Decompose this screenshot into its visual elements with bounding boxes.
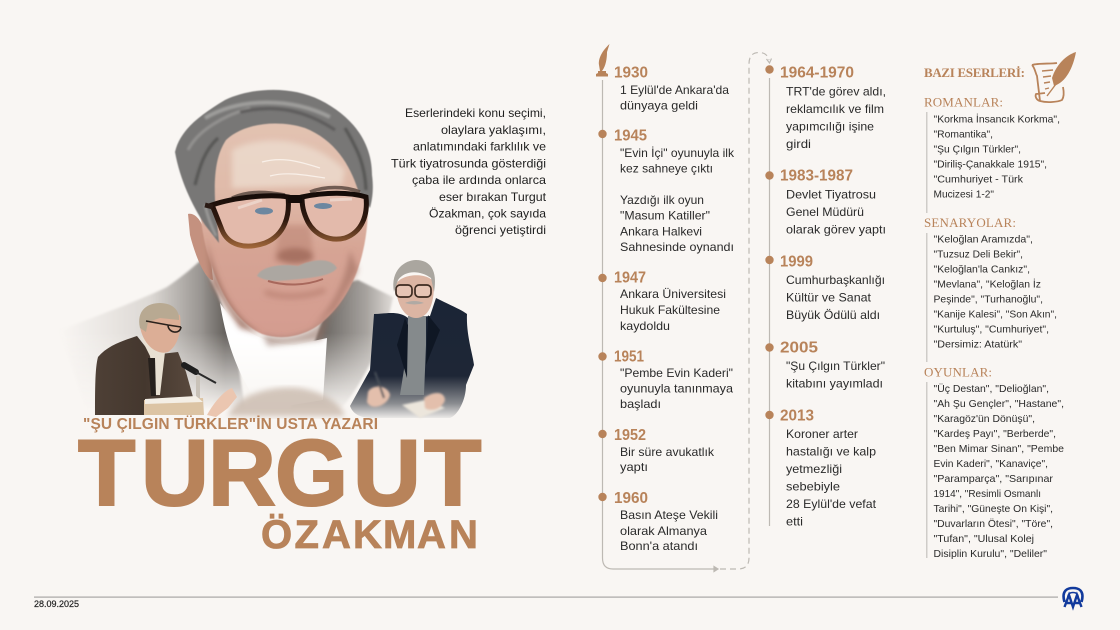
entry 1964-1970: yapımcılığı işine: [786, 120, 874, 134]
entry 1945: kez sahneye çıktı: [620, 162, 713, 176]
small photo: at the podium: [95, 303, 237, 417]
plays: "Üç Destan", "Delioğlan",: [934, 383, 1049, 395]
entry 2005: [765, 340, 885, 390]
screenplays: "Kanije Kalesi", "Son Akın",: [934, 308, 1057, 320]
entry 1951: 1951: [614, 348, 644, 366]
icon: quill and inkwell: [596, 44, 610, 76]
portrait collage: [60, 90, 474, 420]
typewriter shadow: [228, 387, 345, 416]
intro text: Özakman, çok sayıda: [429, 206, 546, 220]
plays: "Duvarların Ötesi", "Töre",: [934, 518, 1053, 530]
entry 2005: "Şu Çılgın Türkler": [786, 359, 885, 373]
microphone: [184, 365, 216, 398]
hand: [207, 388, 237, 417]
plays: Tarihi", "Güneşte On Kişi",: [934, 503, 1053, 515]
entry 1960: olarak Almanya: [620, 524, 707, 538]
novels: "Cumhuriyet - Türk: [934, 174, 1024, 186]
entry 1964-1970: [765, 64, 886, 151]
entry 1960: Basın Ateşe Vekili: [620, 508, 718, 522]
plays: "Karagöz'ün Dönüşü",: [934, 413, 1035, 425]
works panel: [924, 52, 1076, 560]
entry 1983-1987: 1983-1987: [780, 168, 853, 184]
plays: 1914", "Resimli Osmanlı: [934, 488, 1041, 500]
head: [140, 308, 180, 353]
entry 2013: 2013: [780, 408, 814, 424]
turtleneck: [400, 316, 426, 395]
intro text: anlatımındaki farklılık ve: [413, 140, 546, 154]
title: first name: TURGUT: [78, 420, 481, 525]
entry 2013: [765, 408, 877, 528]
entry 1964-1970: reklamcılık ve film: [786, 102, 884, 116]
entry 1947: [598, 270, 726, 333]
screenplays: "Tuzsuz Deli Bekir",: [934, 248, 1023, 260]
entry 2013: 28 Eylül'de vefat: [786, 497, 877, 511]
entry 1952: Bir süre avukatlık: [620, 445, 715, 459]
facial shading: [206, 140, 358, 346]
entry 2013: Koroner arter: [786, 427, 858, 441]
works heading: BAZI ESERLERİ:: [924, 65, 1025, 80]
entry 1952: 1952: [614, 427, 646, 444]
hair: [175, 90, 373, 243]
entry 1947: 1947: [614, 270, 646, 286]
screenplays: "Kurtuluş", "Cumhuriyet",: [934, 324, 1049, 336]
plays: [924, 364, 1064, 560]
entry 1945: Sahnesinde oynandı: [620, 240, 734, 254]
screenplays: "Mevlana", "Keloğlan İz: [934, 278, 1041, 290]
entry 1945: Ankara Halkevi: [620, 224, 702, 238]
entry 1960: 1960: [614, 490, 648, 507]
mouth: [268, 279, 323, 285]
entry 2013: sebebiyle: [786, 480, 840, 494]
screenplays: [924, 215, 1057, 362]
entry 1960: Bonn'a atandı: [620, 539, 698, 553]
entry 1951: [598, 348, 733, 411]
plays: "Paramparça", "Sarıpınar: [934, 473, 1054, 485]
entry 1999: [765, 254, 885, 322]
intro text: [391, 106, 547, 237]
intro text: olaylara yaklaşımı,: [441, 123, 546, 137]
intro text: öğrenci yetiştirdi: [455, 223, 546, 237]
timeline column 1: [598, 64, 735, 553]
entry 1945: Yazdığı ilk oyun: [620, 193, 704, 207]
novels: "Romantika",: [934, 128, 993, 140]
entry 1999: Cumhurbaşkanlığı: [786, 273, 885, 287]
entry 1951: "Pembe Evin Kaderi": [620, 366, 733, 380]
entry 1930: 1930: [614, 64, 648, 82]
entry 1930: 1 Eylül'de Ankara'da: [620, 83, 729, 97]
entry 2013: hastalığı ve kalp: [786, 444, 876, 458]
suit: [95, 336, 193, 415]
entry 1999: 1999: [780, 254, 813, 270]
hair: [393, 260, 435, 292]
moustache: [257, 260, 337, 281]
footer rule: [34, 596, 1058, 598]
intro text: eser bırakan Turgut: [439, 190, 547, 204]
screenplays: "Keloğlan'la Cankız",: [934, 264, 1030, 276]
entry 1964-1970: TRT'de görev aldı,: [786, 84, 886, 98]
entry 2013: yetmezliği: [786, 462, 842, 476]
entry 1999: Kültür ve Sanat: [786, 290, 872, 304]
entry 1930: dünyaya geldi: [620, 98, 698, 112]
suit: [350, 298, 474, 418]
screenplays: "Keloğlan Aramızda",: [934, 234, 1033, 246]
entry 1947: Hukuk Fakültesine: [620, 303, 720, 317]
subtitle: "ŞU ÇILGIN TÜRKLER"İN USTA YAZARI: [83, 416, 378, 433]
glasses: [205, 193, 366, 246]
entry 1983-1987: olarak görev yaptı: [786, 222, 886, 236]
lapels: [397, 315, 440, 378]
entry 1983-1987: Devlet Tiyatrosu: [786, 188, 876, 202]
main portrait: [60, 90, 393, 420]
entry 1952: [598, 427, 715, 474]
head: [396, 275, 434, 318]
screenplays: SENARYOLAR:: [924, 215, 1016, 230]
entry 1983-1987: [765, 168, 886, 236]
entry 1945: [598, 128, 735, 254]
timeline column 2: [765, 64, 886, 528]
eyebrows: [232, 188, 360, 198]
ear: [188, 214, 213, 280]
plays: "Ben Mimar Sinan", "Pembe: [934, 443, 1064, 455]
entry 1983-1987: Genel Müdürü: [786, 205, 864, 219]
intro text: Türk tiyatrosunda gösterdiği: [391, 156, 546, 170]
date: 28.09.2025: [34, 599, 79, 610]
moustache: [405, 301, 424, 304]
face: [199, 121, 368, 337]
novels: "Korkma İnsancık Korkma",: [934, 112, 1060, 126]
plays: Disiplin Kurulu", "Deliler": [934, 548, 1047, 560]
novels: Mucizesi 1-2": [934, 188, 994, 200]
entry 1930: [614, 64, 729, 112]
jacket and shirt: [86, 260, 394, 406]
intro text: Eserlerindeki konu seçimi,: [405, 106, 546, 120]
intro text: çaba ile ardında onlarca: [412, 173, 546, 187]
entry 1947: Ankara Üniversitesi: [620, 287, 726, 301]
entry 1945: "Evin İçi" oyunuyla ilk: [620, 146, 735, 160]
shirt and tie: [140, 336, 165, 395]
entry 1951: başladı: [620, 397, 661, 411]
entry 1947: kaydoldu: [620, 319, 670, 333]
entry 2013: etti: [786, 514, 803, 528]
hair highlights: [188, 102, 366, 236]
forehead wrinkles: [262, 160, 325, 178]
podium: [144, 398, 204, 415]
plays: "Ah Şu Gençler", "Hastane",: [934, 398, 1064, 410]
glasses: [146, 321, 181, 332]
papers: [145, 396, 203, 404]
plays: Evin Kaderi", "Kanaviçe",: [934, 458, 1048, 470]
entry 2005: 2005: [780, 340, 818, 356]
entry 1964-1970: 1964-1970: [780, 64, 854, 82]
plays: "Kardeş Payı", "Berberde",: [934, 428, 1056, 440]
novels: "Şu Çılgın Türkler",: [934, 144, 1021, 156]
icon: AA logo: [1064, 588, 1082, 607]
screenplays: "Dersimiz: Atatürk": [934, 338, 1022, 350]
small photo: writing: [350, 260, 474, 418]
entry 1960: [598, 490, 718, 553]
entry 1945: "Masum Katiller": [620, 208, 710, 222]
entry 1951: oyunuyla tanınmaya: [620, 382, 733, 396]
glasses: [396, 285, 431, 297]
icon: scroll and feather: [1032, 52, 1076, 102]
title: surname: ÖZAKMAN: [261, 512, 478, 557]
screenplays: Peşinde", "Turhanoğlu",: [934, 294, 1043, 306]
timeline connector: [602, 52, 772, 572]
entry 1964-1970: girdi: [786, 137, 811, 151]
plays: OYUNLAR:: [924, 364, 992, 380]
entry 1945: 1945: [614, 128, 647, 144]
entry 1999: Büyük Ödülü aldı: [786, 308, 880, 322]
novels: ROMANLAR:: [924, 94, 1003, 110]
hands and notebook: [367, 372, 445, 418]
plays: "Tufan", "Ulusal Kolej: [934, 533, 1034, 545]
entry 2005: kitabını yayımladı: [786, 376, 883, 390]
hair: [139, 303, 179, 332]
novels: [924, 94, 1060, 213]
entry 1952: yaptı: [620, 460, 648, 474]
novels: "Diriliş-Çanakkale 1915",: [934, 158, 1047, 170]
